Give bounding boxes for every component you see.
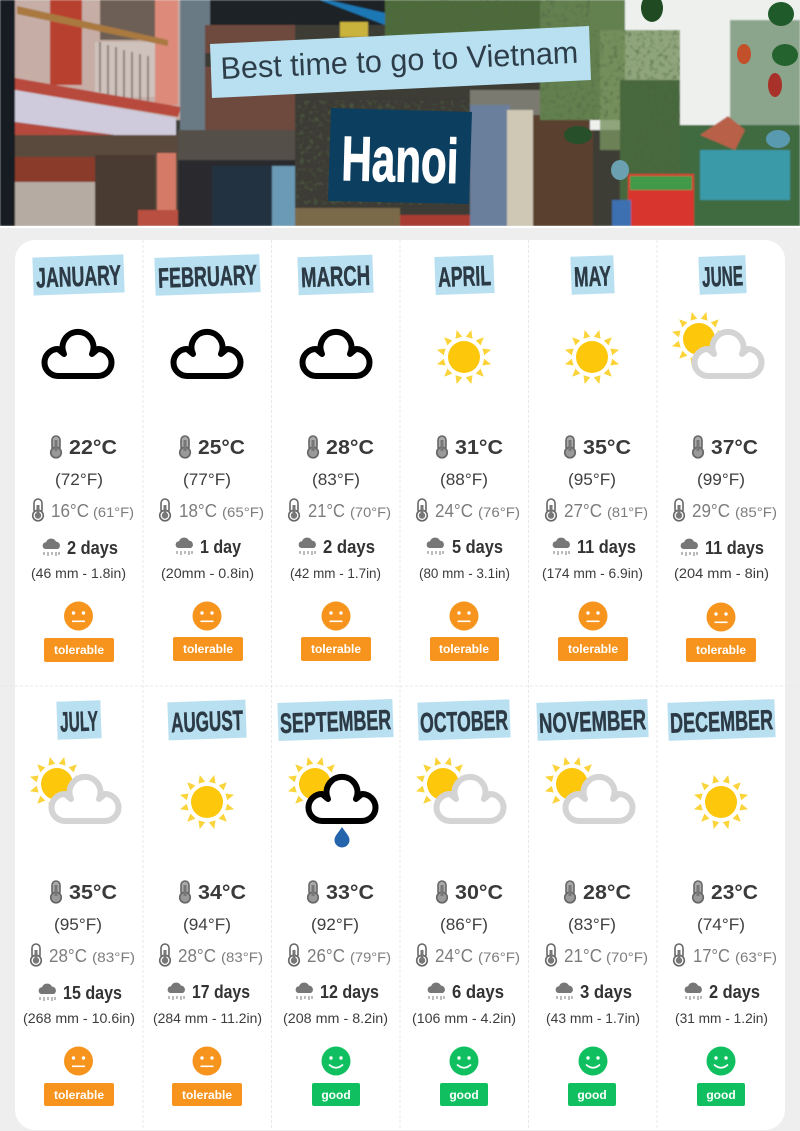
panel: February — [154, 254, 264, 661]
month heading: SEPTEMBER — [280, 704, 392, 739]
high temperature: 22°C — [69, 437, 117, 459]
month heading: MAY — [574, 260, 612, 293]
rating badge — [173, 637, 243, 661]
high temperature — [180, 881, 246, 904]
month heading: JUNE — [702, 260, 744, 293]
high temperature: 35°C — [69, 882, 117, 904]
rainy days: 6 days — [452, 982, 504, 1002]
month heading: NOVEMBER — [539, 704, 647, 739]
rating badge — [686, 638, 756, 662]
high temperature — [51, 881, 117, 904]
low temperature: 21°C — [308, 501, 345, 521]
rating badge: tolerable — [54, 643, 104, 657]
high temperature in Fahrenheit: (94°F) — [183, 915, 231, 934]
icon: neutral face — [450, 602, 478, 630]
high temperature — [565, 881, 631, 904]
low temperature: (79°F) — [350, 949, 391, 965]
icon: neutral face — [706, 602, 736, 632]
panel: October — [412, 699, 520, 1106]
high temperature in Fahrenheit: (88°F) — [440, 470, 488, 489]
low temperature: (70°F) — [350, 504, 391, 520]
low temperature: (83°F) — [92, 949, 135, 965]
rating badge — [301, 637, 371, 661]
rainy days: 2 days — [709, 982, 760, 1002]
low temperature — [289, 499, 391, 521]
high temperature in Fahrenheit: (99°F) — [697, 470, 745, 489]
rainy days — [556, 982, 632, 1002]
month heading: APRIL — [438, 260, 492, 293]
high temperature — [308, 881, 374, 904]
low temperature — [546, 944, 648, 966]
rating badge: good — [706, 1088, 736, 1102]
high temperature in Fahrenheit: (83°F) — [312, 470, 360, 489]
low temperature: 24°C — [435, 501, 473, 521]
rainy days: 12 days — [320, 982, 379, 1002]
rainy days — [296, 982, 379, 1002]
high temperature: 23°C — [711, 882, 758, 904]
high temperature in Fahrenheit: (95°F) — [568, 470, 616, 489]
icon: neutral face — [322, 602, 350, 630]
high temperature — [437, 436, 503, 459]
low temperature — [33, 499, 134, 521]
rainy days — [176, 537, 241, 557]
panel: May — [542, 255, 648, 661]
high temperature: 34°C — [198, 882, 246, 904]
high temperature — [693, 881, 758, 904]
high temperature: 37°C — [711, 437, 758, 459]
high temperature: 35°C — [583, 437, 631, 459]
rainy days — [681, 538, 764, 558]
month heading — [698, 255, 747, 295]
rating badge: tolerable — [183, 642, 233, 656]
month heading — [167, 700, 247, 740]
low temperature: (65°F) — [222, 504, 264, 520]
rainy days: 2 days — [323, 537, 375, 557]
low temperature — [160, 944, 263, 966]
icon: sun, black cloud and rain drop — [287, 756, 376, 848]
low temperature: (81°F) — [607, 504, 648, 520]
icon: sun behind grey cloud — [415, 756, 504, 821]
icon: smiling face — [450, 1046, 478, 1076]
low temperature: 26°C — [307, 946, 345, 966]
low temperature: 17°C — [693, 946, 730, 966]
panel: August — [153, 700, 263, 1106]
icon: smiling face — [322, 1046, 350, 1076]
rainfall: (42 mm - 1.7in) — [290, 565, 381, 581]
icon: smiling face — [706, 1046, 736, 1076]
low temperature — [546, 499, 648, 521]
high temperature — [437, 881, 503, 904]
rainy days: 5 days — [452, 537, 503, 557]
month heading: MARCH — [301, 260, 371, 293]
panel: March — [289, 255, 391, 661]
main card — [15, 240, 785, 1130]
rainy days: 3 days — [580, 982, 632, 1002]
high temperature in Fahrenheit: (86°F) — [440, 915, 488, 934]
high temperature — [693, 436, 758, 459]
icon: neutral face — [192, 1046, 222, 1076]
rating badge — [558, 637, 628, 661]
rainy days — [39, 983, 122, 1003]
panel: September — [277, 699, 394, 1106]
rating badge: tolerable — [182, 1088, 232, 1102]
rainfall: (46 mm - 1.8in) — [31, 565, 126, 581]
icon: sun — [436, 329, 492, 385]
month heading — [277, 699, 394, 741]
month heading — [154, 254, 261, 296]
high temperature: 28°C — [326, 437, 374, 459]
low temperature: (83°F) — [221, 949, 263, 965]
rainfall: (268 mm - 10.6in) — [23, 1010, 135, 1026]
rating badge — [440, 1083, 488, 1106]
high temperature in Fahrenheit: (95°F) — [54, 915, 102, 934]
rating badge — [697, 1083, 745, 1106]
city label: Hanoi: Hanoi — [341, 124, 459, 197]
rating badge: tolerable — [439, 642, 489, 656]
rating badge: good — [321, 1088, 351, 1102]
icon: sun behind grey cloud — [544, 756, 632, 821]
rating badge: tolerable — [696, 643, 746, 657]
rainfall: (204 mm - 8in) — [674, 565, 769, 581]
month heading: AUGUST — [171, 705, 244, 738]
low temperature: 28°C — [49, 946, 87, 966]
panel: November — [536, 699, 649, 1106]
white strip under photo — [0, 226, 800, 228]
high temperature: 25°C — [198, 437, 245, 459]
low temperature: 18°C — [179, 501, 217, 521]
month heading: FEBRUARY — [158, 259, 258, 294]
title banner: Best time to go to Vietnam — [220, 35, 579, 86]
month heading — [32, 254, 125, 296]
month heading: OCTOBER — [420, 704, 509, 739]
high temperature — [308, 436, 374, 459]
rainy days: 2 days — [67, 538, 118, 558]
low temperature: 28°C — [178, 946, 216, 966]
high temperature: 33°C — [326, 882, 374, 904]
high temperature: 30°C — [455, 882, 503, 904]
low temperature: (76°F) — [478, 504, 520, 520]
high temperature in Fahrenheit: (83°F) — [568, 915, 616, 934]
rainy days: 11 days — [705, 538, 764, 558]
rainfall: (208 mm - 8.2in) — [283, 1010, 388, 1026]
rating badge: good — [577, 1088, 607, 1102]
low temperature: 27°C — [564, 501, 602, 521]
low temperature: (70°F) — [606, 949, 648, 965]
panel: June — [671, 255, 777, 662]
rainy days — [299, 537, 375, 557]
rating badge: tolerable — [568, 642, 618, 656]
rating badge — [44, 1083, 114, 1106]
rainfall: (43 mm - 1.7in) — [546, 1010, 640, 1026]
high temperature in Fahrenheit: (72°F) — [55, 470, 103, 489]
icon: sun — [564, 329, 620, 385]
month heading: JANUARY — [36, 260, 122, 293]
low temperature — [674, 499, 777, 521]
icon: cloud — [174, 332, 240, 376]
city label: Hanoi — [328, 108, 472, 204]
rating badge: good — [449, 1088, 479, 1102]
title banner — [210, 26, 591, 98]
low temperature: (85°F) — [735, 504, 777, 520]
icon: sun behind grey cloud — [29, 756, 118, 821]
high temperature in Fahrenheit: (92°F) — [311, 915, 359, 934]
icon: neutral face — [192, 602, 222, 630]
rainfall: (31 mm - 1.2in) — [675, 1010, 768, 1026]
rainy days — [168, 982, 250, 1002]
rainy days — [427, 537, 503, 557]
rating badge — [430, 637, 499, 661]
low temperature — [417, 499, 520, 521]
high temperature — [51, 436, 117, 459]
low temperature: (76°F) — [478, 949, 520, 965]
panel: January — [31, 254, 134, 662]
rating badge — [44, 638, 114, 662]
panel: July — [23, 700, 135, 1106]
high temperature: 28°C — [583, 882, 631, 904]
month heading: JULY — [60, 705, 99, 738]
rating badge: tolerable — [54, 1088, 104, 1102]
rainfall: (20mm - 0.8in) — [161, 565, 254, 581]
rainfall: (284 mm - 11.2in) — [153, 1010, 262, 1026]
rainfall: (174 mm - 6.9in) — [542, 565, 643, 581]
low temperature — [31, 944, 135, 966]
rainy days: 11 days — [577, 537, 636, 557]
icon: sun — [693, 774, 749, 830]
low temperature: 16°C — [51, 501, 89, 521]
low temperature: 29°C — [692, 501, 730, 521]
rating badge — [172, 1083, 242, 1106]
rainfall: (106 mm - 4.2in) — [412, 1010, 516, 1026]
low temperature — [289, 944, 391, 966]
rating badge — [568, 1083, 616, 1106]
low temperature: 21°C — [564, 946, 602, 966]
icon: sun — [179, 774, 235, 830]
icon: cloud — [302, 332, 370, 376]
rainy days: 1 day — [200, 537, 241, 557]
low temperature — [417, 944, 520, 966]
rainfall: (80 mm - 3.1in) — [419, 565, 510, 581]
low temperature: (63°F) — [735, 949, 777, 965]
month heading — [297, 255, 374, 295]
header photo: Hanoi street — [0, 0, 800, 226]
low temperature — [674, 944, 777, 966]
month heading — [536, 699, 649, 741]
low temperature: 24°C — [435, 946, 473, 966]
high temperature in Fahrenheit: (74°F) — [697, 915, 745, 934]
rainy days — [43, 538, 118, 558]
icon: sun behind grey cloud — [671, 311, 762, 376]
panel: December — [667, 699, 777, 1106]
high temperature — [565, 436, 631, 459]
rainy days: 17 days — [192, 982, 250, 1002]
icon: neutral face — [64, 602, 93, 630]
icon: smiling face — [578, 1046, 608, 1076]
month heading — [570, 255, 615, 295]
rating badge — [312, 1083, 360, 1106]
icon: neutral face — [64, 1046, 93, 1076]
rainy days — [685, 982, 760, 1002]
low temperature: (61°F) — [93, 504, 134, 520]
high temperature: 31°C — [455, 437, 503, 459]
rainy days — [553, 537, 636, 557]
month heading — [434, 255, 495, 295]
high temperature — [180, 436, 245, 459]
month heading — [417, 699, 511, 741]
icon: neutral face — [578, 602, 608, 630]
rainy days: 15 days — [63, 983, 122, 1003]
month heading — [56, 700, 102, 740]
rating badge: tolerable — [311, 642, 361, 656]
icon: cloud — [44, 332, 112, 376]
rainy days — [428, 982, 504, 1002]
high temperature in Fahrenheit: (77°F) — [183, 470, 231, 489]
panel: April — [417, 255, 520, 661]
low temperature — [160, 499, 264, 521]
